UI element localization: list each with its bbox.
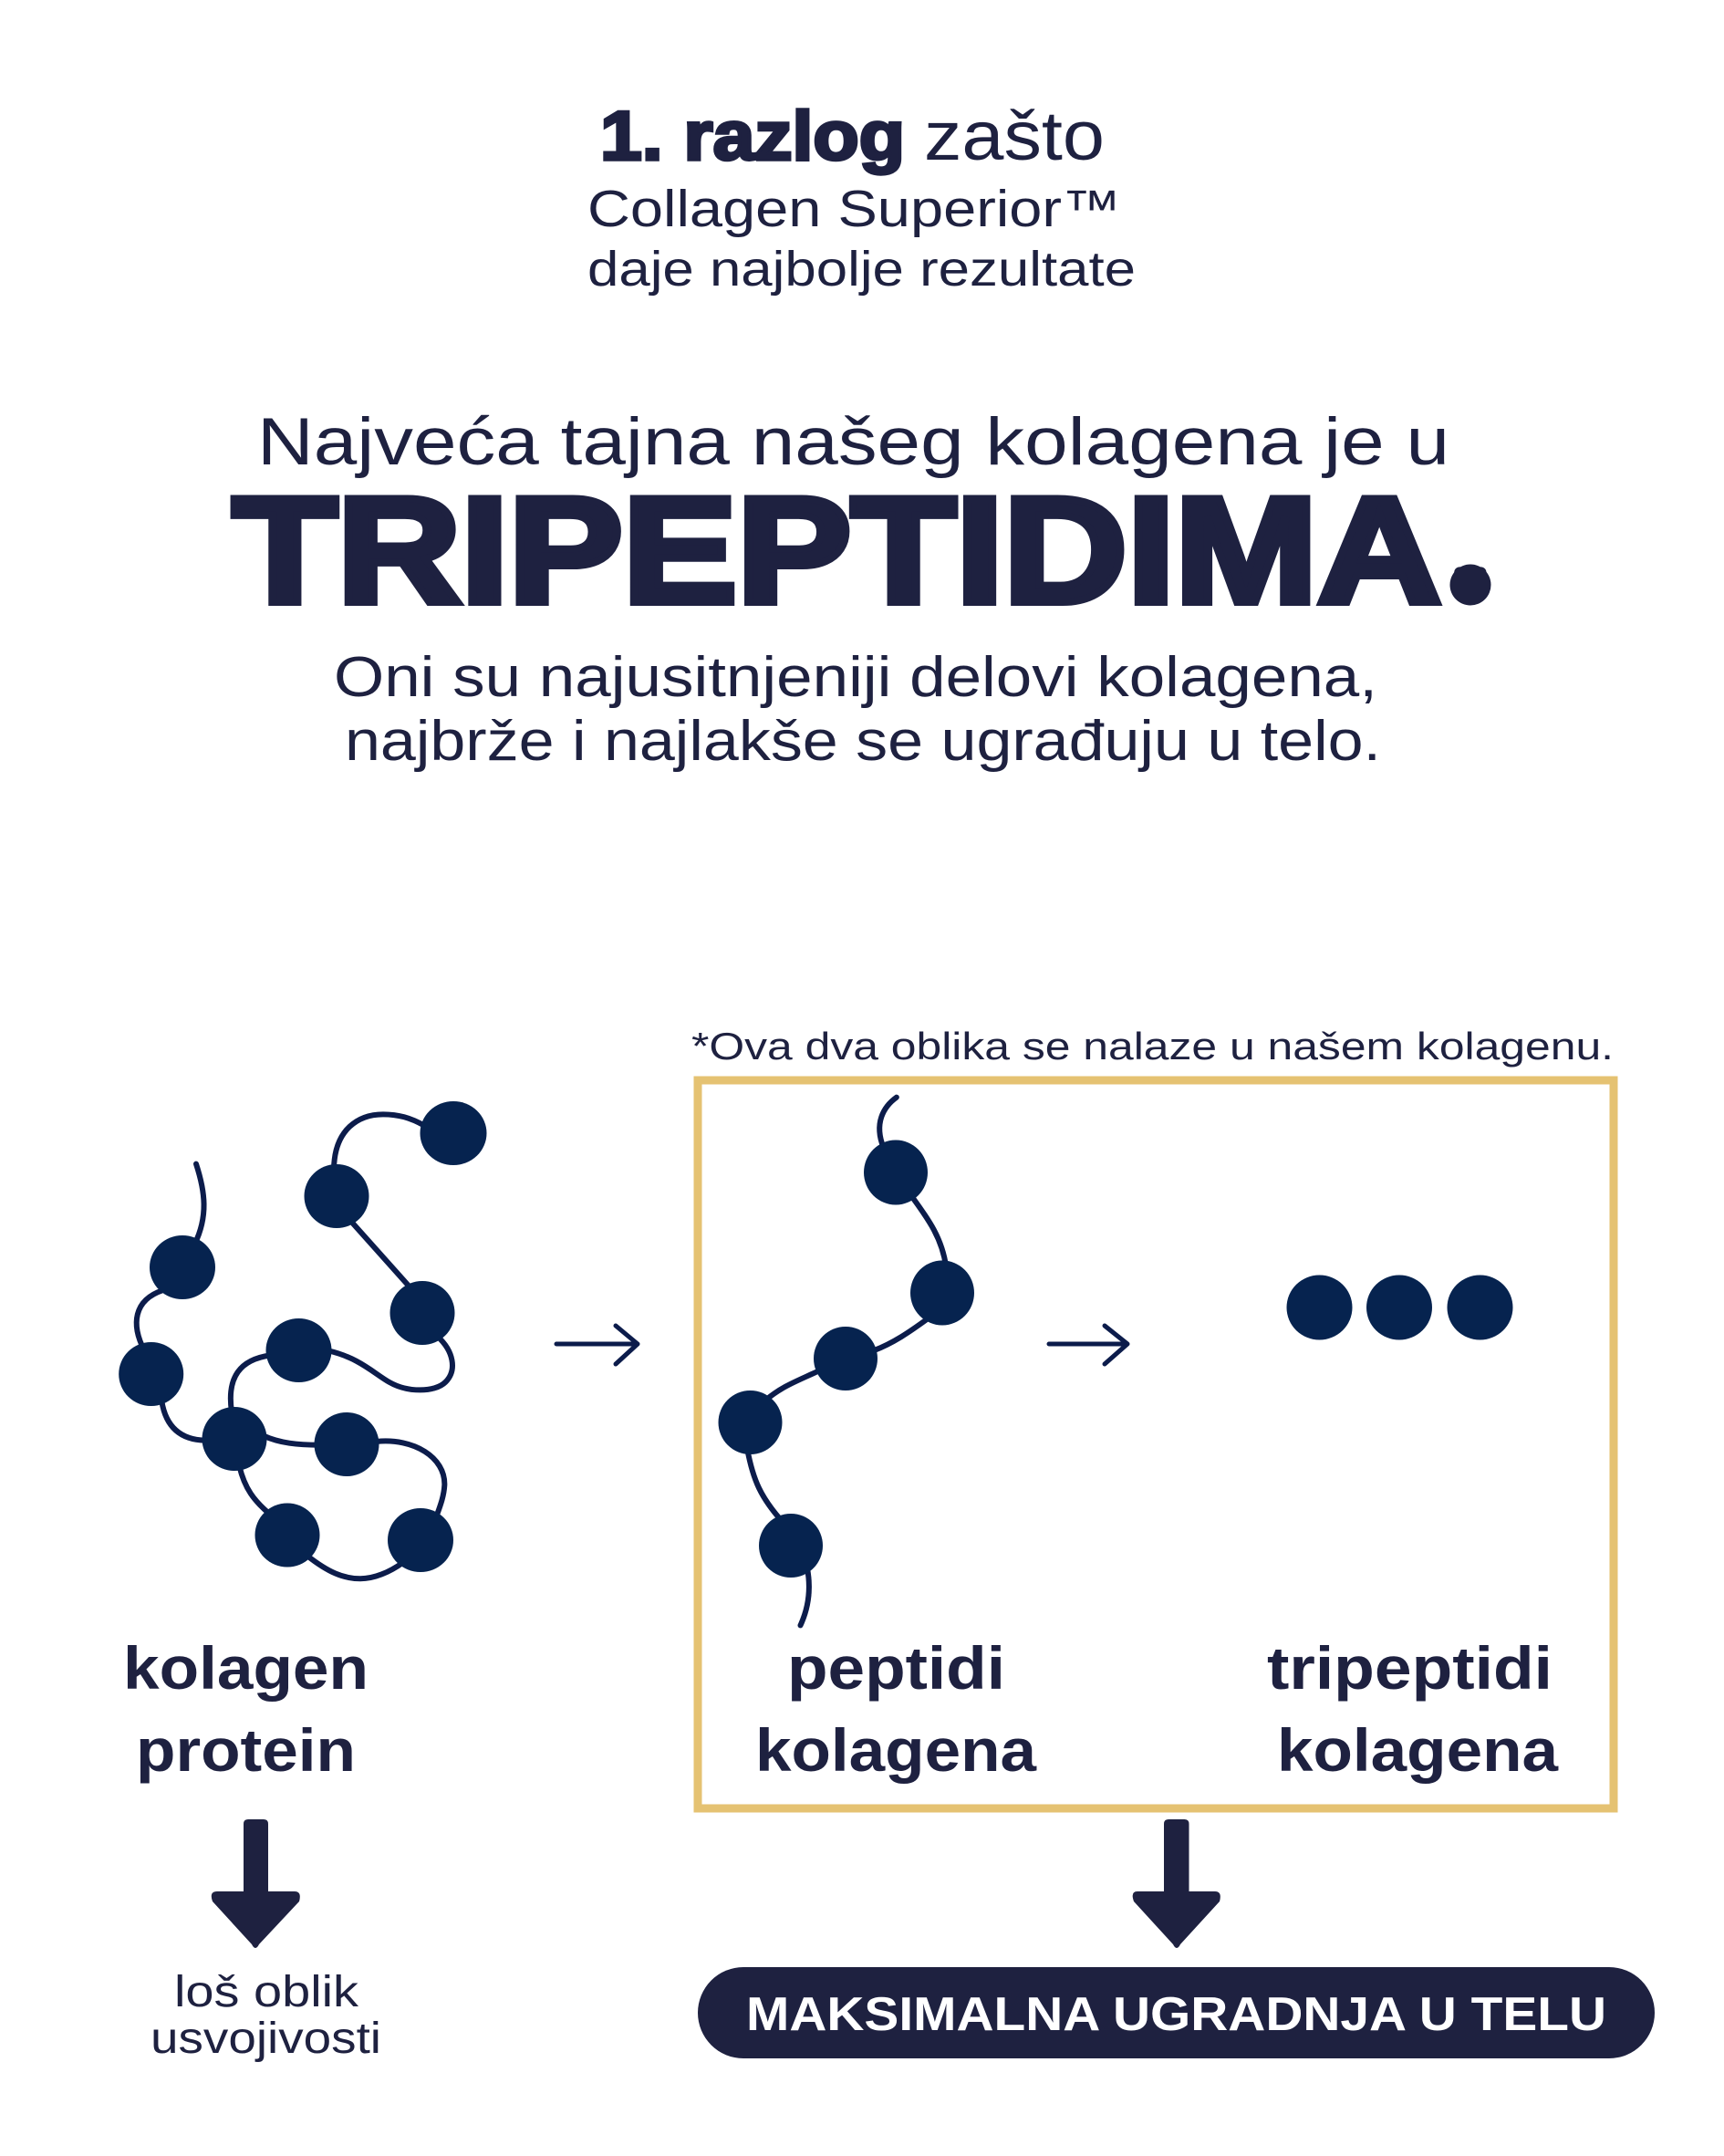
label: tripeptidi kolagena: [1267, 1634, 1559, 1784]
label: tripeptidi kolagena: tripeptidi: [1267, 1634, 1553, 1702]
headline intro: Najveća tajna našeg kolagena je u: [257, 405, 1449, 479]
subheading text: Oni su najusitnjeniji delovi kolagena,: [334, 646, 1377, 709]
subheading text: najbrže i najlakše se ugrađuju u telo.: [345, 710, 1381, 773]
subheading text: [334, 646, 1381, 773]
headline: TRIPEPTIDIMA: TRIPEPTIDIMA: [233, 466, 1441, 634]
diagram: three tripeptide beads: [1286, 1276, 1512, 1339]
text: poor absorption form: usvojivosti: [151, 2015, 381, 2063]
gold frame: [698, 1080, 1614, 1808]
diagram: collagen peptides chain: [719, 1098, 974, 1625]
label: peptidi kolagena: kolagena: [755, 1716, 1037, 1784]
heading: reason line: 1. razlog: [600, 98, 905, 175]
label: peptidi kolagena: [755, 1634, 1037, 1784]
down arrow: right: [1133, 1819, 1220, 1948]
heading: results line: daje najbolje rezultate: [587, 242, 1136, 297]
text: poor absorption form: loš oblik: [174, 1968, 359, 2016]
down arrow: left: [212, 1819, 300, 1948]
label: tripeptidi kolagena: kolagena: [1277, 1716, 1559, 1784]
heading: product name: Collagen Superior™: [587, 180, 1121, 238]
label: peptidi kolagena: peptidi: [787, 1634, 1005, 1702]
note above box: *Ova dva oblika se nalaze u našem kolagenu.: [691, 1025, 1614, 1068]
callout pill: maximum incorporation: [698, 1967, 1655, 2058]
diagram: collagen protein chain: [119, 1101, 486, 1578]
text: poor absorption form: [151, 1968, 381, 2063]
arrow: protein to peptides: [556, 1326, 638, 1364]
label: kolagen protein: kolagen: [123, 1634, 369, 1702]
arrow: peptides to tripeptides: [1049, 1326, 1127, 1364]
label: kolagen protein: protein: [136, 1716, 356, 1784]
callout pill: maximum incorporation: MAKSIMALNA UGRADNJA U TELU: [746, 1988, 1606, 2041]
heading: reason line: zašto: [924, 98, 1105, 175]
headline: TRIPEPTIDIMA: .: [1449, 459, 1491, 627]
heading: reason line: [600, 98, 1105, 175]
label: kolagen protein: [123, 1634, 369, 1784]
